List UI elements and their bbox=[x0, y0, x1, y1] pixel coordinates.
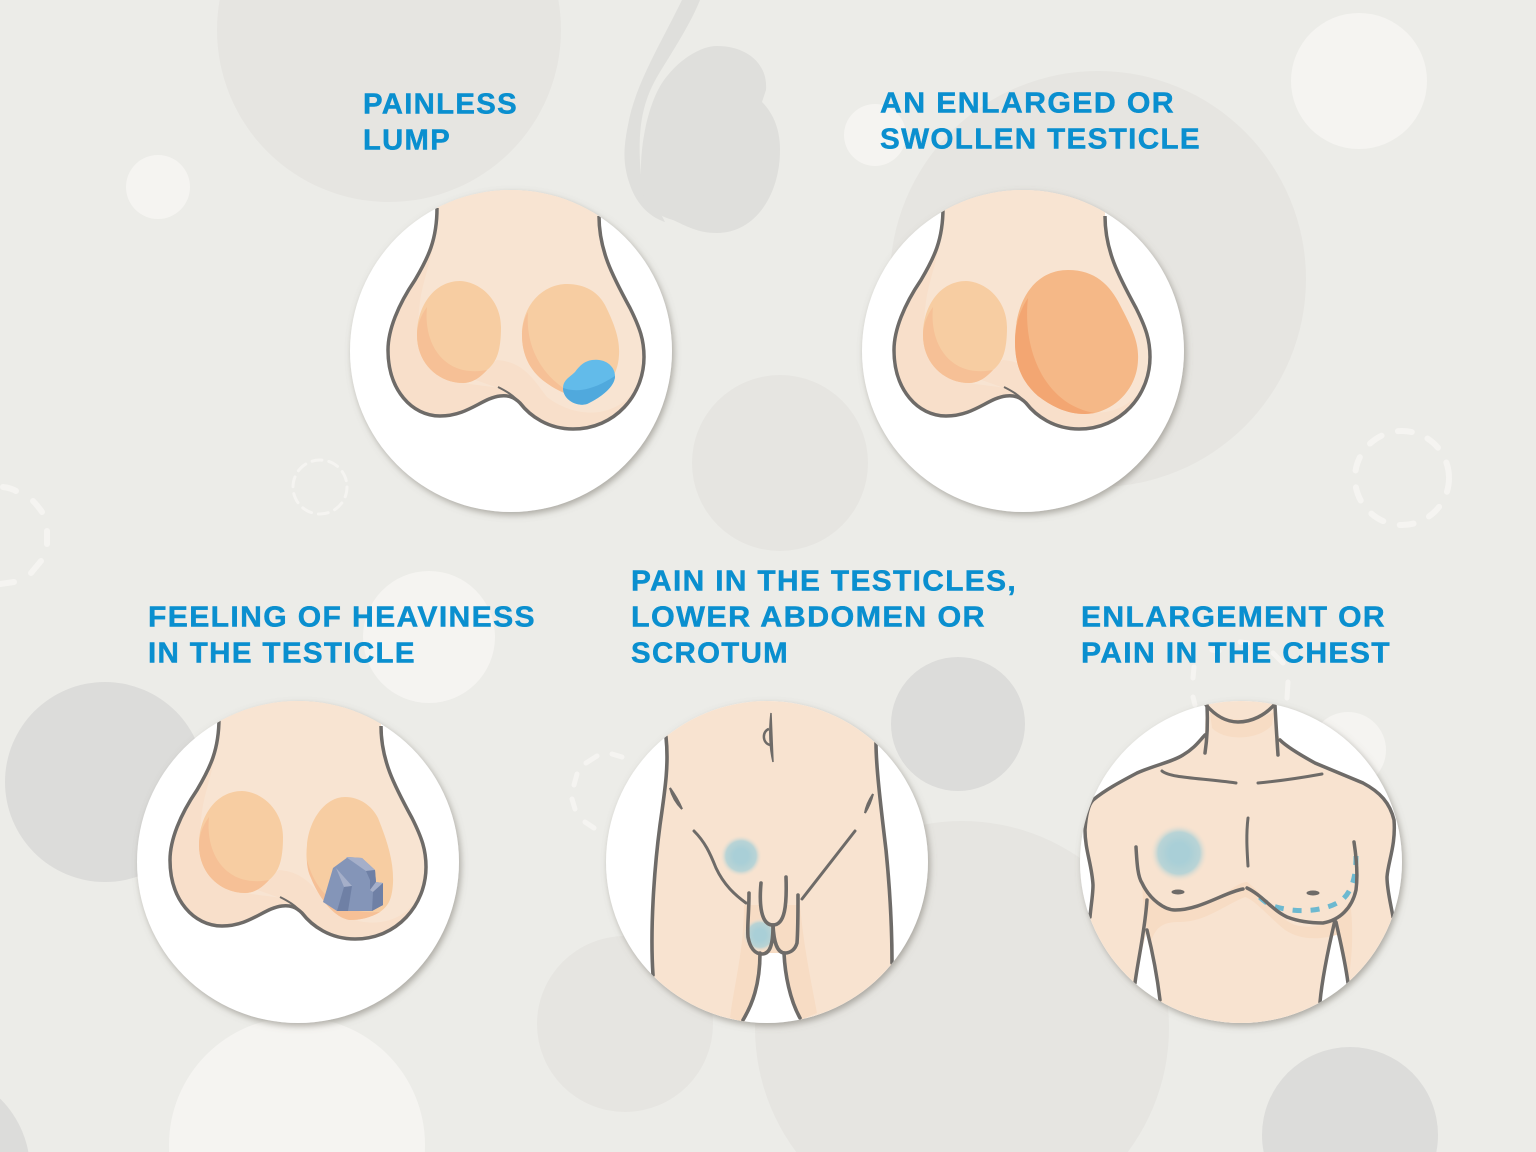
icon: scrotum pain spot bbox=[744, 920, 772, 950]
heading: feeling of heaviness bbox=[148, 602, 536, 670]
heading: enlargement or pain in chest: PAIN IN THE CHEST bbox=[1081, 638, 1391, 670]
heading: enlargement or pain in chest: ENLARGEMENT OR bbox=[1081, 602, 1386, 634]
heading: painless lump: LUMP bbox=[363, 124, 451, 156]
icon: abdomen pain spot bbox=[722, 837, 760, 875]
shading under neck and pectorals bbox=[1142, 712, 1352, 983]
heading: painless lump: PAINLESS bbox=[363, 88, 518, 120]
body outlines bbox=[652, 737, 892, 1020]
panel: chest illustration bbox=[1080, 690, 1402, 1030]
panel: heaviness illustration bbox=[137, 690, 459, 1023]
leg and groin shading bbox=[730, 905, 817, 1022]
heading: pain in testicles, abdomen or scrotum: SCROTUM bbox=[631, 638, 789, 670]
panel: painless lump illustration bbox=[350, 180, 672, 512]
heading: feeling of heaviness: FEELING OF HEAVINESS bbox=[148, 602, 536, 634]
heading: painless lump bbox=[363, 88, 518, 156]
chest outlines bbox=[1085, 705, 1394, 1002]
icon: enlarged testicle bbox=[1015, 270, 1138, 414]
heading: enlarged or swollen testicle: AN ENLARGED OR bbox=[880, 88, 1175, 120]
panel: swollen testicle illustration bbox=[862, 180, 1184, 512]
icon: blue lump bbox=[563, 360, 615, 405]
heading: enlarged or swollen testicle: SWOLLEN TESTICLE bbox=[880, 124, 1201, 156]
icon: rock bbox=[323, 857, 383, 911]
heading: enlarged or swollen testicle bbox=[880, 88, 1201, 156]
icon: nipples bbox=[1172, 890, 1320, 896]
heading: pain in testicles, abdomen or scrotum bbox=[631, 566, 1017, 670]
heading: enlargement or pain in chest bbox=[1081, 602, 1391, 670]
icon: dashed enlargement line bbox=[1257, 856, 1356, 911]
icon: navel bbox=[764, 713, 773, 762]
heading: pain in testicles, abdomen or scrotum: LOWER ABDOMEN OR bbox=[631, 602, 986, 634]
icon: chest pain spot bbox=[1153, 827, 1205, 879]
heading: pain in testicles, abdomen or scrotum: PAIN IN THE TESTICLES, bbox=[631, 566, 1017, 598]
panel: lower abdomen illustration bbox=[606, 690, 928, 1030]
heading: feeling of heaviness: IN THE TESTICLE bbox=[148, 638, 416, 670]
